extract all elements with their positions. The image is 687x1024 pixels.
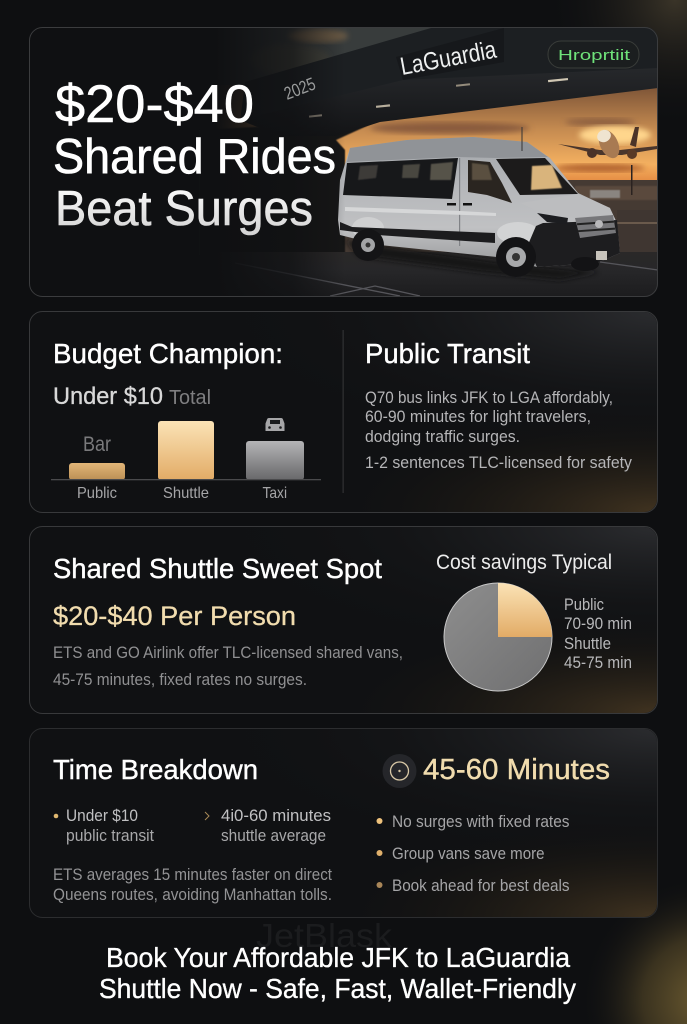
text block: public transit: 60-90 minutes for light travelers,: [365, 408, 591, 426]
bar chart: Shuttle: [163, 485, 209, 502]
text block: shuttle details: 45-75 minutes, fixed rates no surges.: [53, 671, 307, 689]
list: benefits: No surges with fixed rates: [392, 813, 570, 831]
heading: budget champion: Budget Champion:: [53, 338, 283, 369]
panel: budget champion and public transit: [30, 312, 658, 512]
list: benefits: [376, 813, 570, 895]
badge: Hroprtiit: [558, 47, 631, 64]
heading: shared shuttle sweet spot: Shared Shuttle Sweet Spot: [53, 553, 382, 584]
price: per person: $20-$40 Per Person: [53, 601, 296, 631]
pie legend: Shuttle: [564, 634, 611, 653]
sign: LaGuardia: LaGuardia: [398, 36, 499, 81]
text block: public transit: dodging traffic surges.: [365, 428, 520, 446]
pie legend: Public: [564, 595, 604, 614]
text block: ETS note: Queens routes, avoiding Manhattan tolls.: [53, 886, 332, 904]
text block: public transit: 1-2 sentences TLC-licensed for safety: [365, 454, 633, 472]
bar chart: Public: [77, 485, 117, 502]
chart heading: cost savings: Cost savings Typical: [436, 551, 612, 574]
hero headline: [53, 75, 336, 236]
bar chart: Taxi: [262, 485, 287, 502]
call to action: Shuttle Now - Safe, Fast, Wallet-Friendly: [99, 973, 576, 1004]
bar chart: Bar: [83, 433, 111, 456]
call to action: [99, 942, 576, 1004]
panel: hero: [29, 27, 658, 297]
text block: shuttle details: [53, 644, 403, 689]
hero headline: Beat Surges: [55, 182, 313, 236]
badge: [548, 41, 639, 68]
ghost watermark: JetBlask: [256, 917, 393, 954]
stat: 45-60 minutes: 45-60 Minutes: [423, 754, 610, 786]
text block: ETS note: ETS averages 15 minutes faster on direct: [53, 866, 332, 884]
sign: 2025: 2025: [281, 74, 318, 104]
pie legend: 45-75 min: [564, 653, 632, 672]
road markings: [235, 262, 658, 296]
text block: public transit: Q70 bus links JFK to LGA affordably,: [365, 389, 613, 407]
canopy and signage: [240, 27, 658, 136]
bullet: public transit: Under $10: [66, 807, 138, 825]
call to action: Book Your Affordable JFK to LaGuardia: [106, 942, 570, 973]
bullet: shuttle average: [205, 807, 331, 845]
hero headline: $20-$40: [55, 75, 254, 134]
bullet: public transit: [54, 807, 154, 845]
subheading: under $10 total: Under $10: [53, 383, 163, 410]
icon: clock: [382, 754, 416, 788]
text block: public transit: [365, 389, 633, 472]
hero headline: Shared Rides: [53, 130, 336, 184]
bar chart: [51, 418, 321, 502]
subheading: under $10 total: Total: [169, 387, 211, 409]
van: [338, 127, 620, 277]
pie legend: 70-90 min: [564, 614, 632, 633]
hero photo: airport scene: [200, 27, 658, 297]
bullet: shuttle average: shuttle average: [221, 827, 326, 845]
text block: shuttle details: ETS and GO Airlink offer TLC-licensed shared vans,: [53, 644, 403, 662]
list: benefits: Group vans save more: [392, 845, 544, 863]
pie chart: [444, 583, 552, 691]
bullet: public transit: public transit: [66, 827, 154, 845]
plane: [558, 127, 657, 195]
heading: public transit: Public Transit: [365, 338, 530, 369]
list: benefits: Book ahead for best deals: [392, 877, 570, 895]
pie legend: [564, 595, 632, 672]
text block: ETS note: [53, 866, 332, 904]
panel: time breakdown: [30, 728, 658, 918]
panel: shared shuttle sweet spot: [30, 526, 658, 714]
icon: car: [266, 418, 284, 431]
heading: time breakdown: Time Breakdown: [53, 754, 258, 785]
bullet: shuttle average: 4i0-60 minutes: [221, 807, 331, 825]
